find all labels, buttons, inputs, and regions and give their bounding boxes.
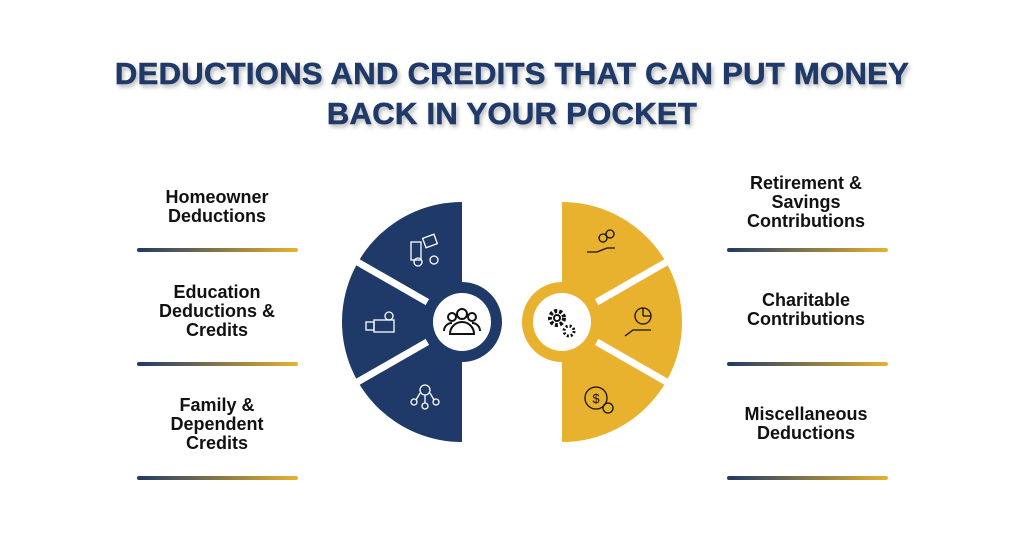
label: miscellaneous	[744, 404, 868, 443]
label: education: Credits	[186, 320, 248, 340]
label: education: Deductions &	[159, 301, 275, 321]
left half disk	[340, 202, 502, 442]
label: homeowner: Deductions	[168, 206, 266, 226]
title	[115, 56, 912, 131]
label: family: Credits	[186, 433, 248, 453]
label: education: Education	[173, 282, 260, 302]
label: family	[170, 395, 264, 453]
label: miscellaneous: Miscellaneous	[744, 404, 868, 424]
label: family: Family &	[179, 395, 255, 415]
title: DEDUCTIONS AND CREDITS THAT CAN PUT MONEY	[115, 56, 909, 91]
icon: gears	[550, 311, 574, 336]
label: homeowner: Homeowner	[165, 187, 269, 207]
icon: coins	[411, 234, 438, 266]
icon: dollar percent	[585, 387, 613, 413]
label: charitable: Contributions	[747, 309, 865, 329]
label: education	[159, 282, 275, 340]
label: charitable	[747, 290, 865, 329]
label: family: Dependent	[170, 414, 264, 434]
label: retirement: Savings	[771, 192, 841, 212]
icon: hand coins	[587, 230, 615, 252]
icon: people	[444, 309, 480, 334]
label: retirement: Retirement &	[750, 173, 862, 193]
icon: network gear	[411, 385, 439, 409]
label: retirement	[747, 173, 865, 231]
icon: hand chart	[625, 308, 651, 336]
label: charitable: Charitable	[762, 290, 850, 310]
label: homeowner	[165, 187, 269, 226]
icon: money hand	[366, 312, 394, 332]
icon: dollar percent: $	[592, 391, 600, 406]
title: BACK IN YOUR POCKET	[327, 96, 697, 131]
label: retirement: Contributions	[747, 211, 865, 231]
label: miscellaneous: Deductions	[757, 423, 855, 443]
right half disk	[522, 202, 684, 442]
